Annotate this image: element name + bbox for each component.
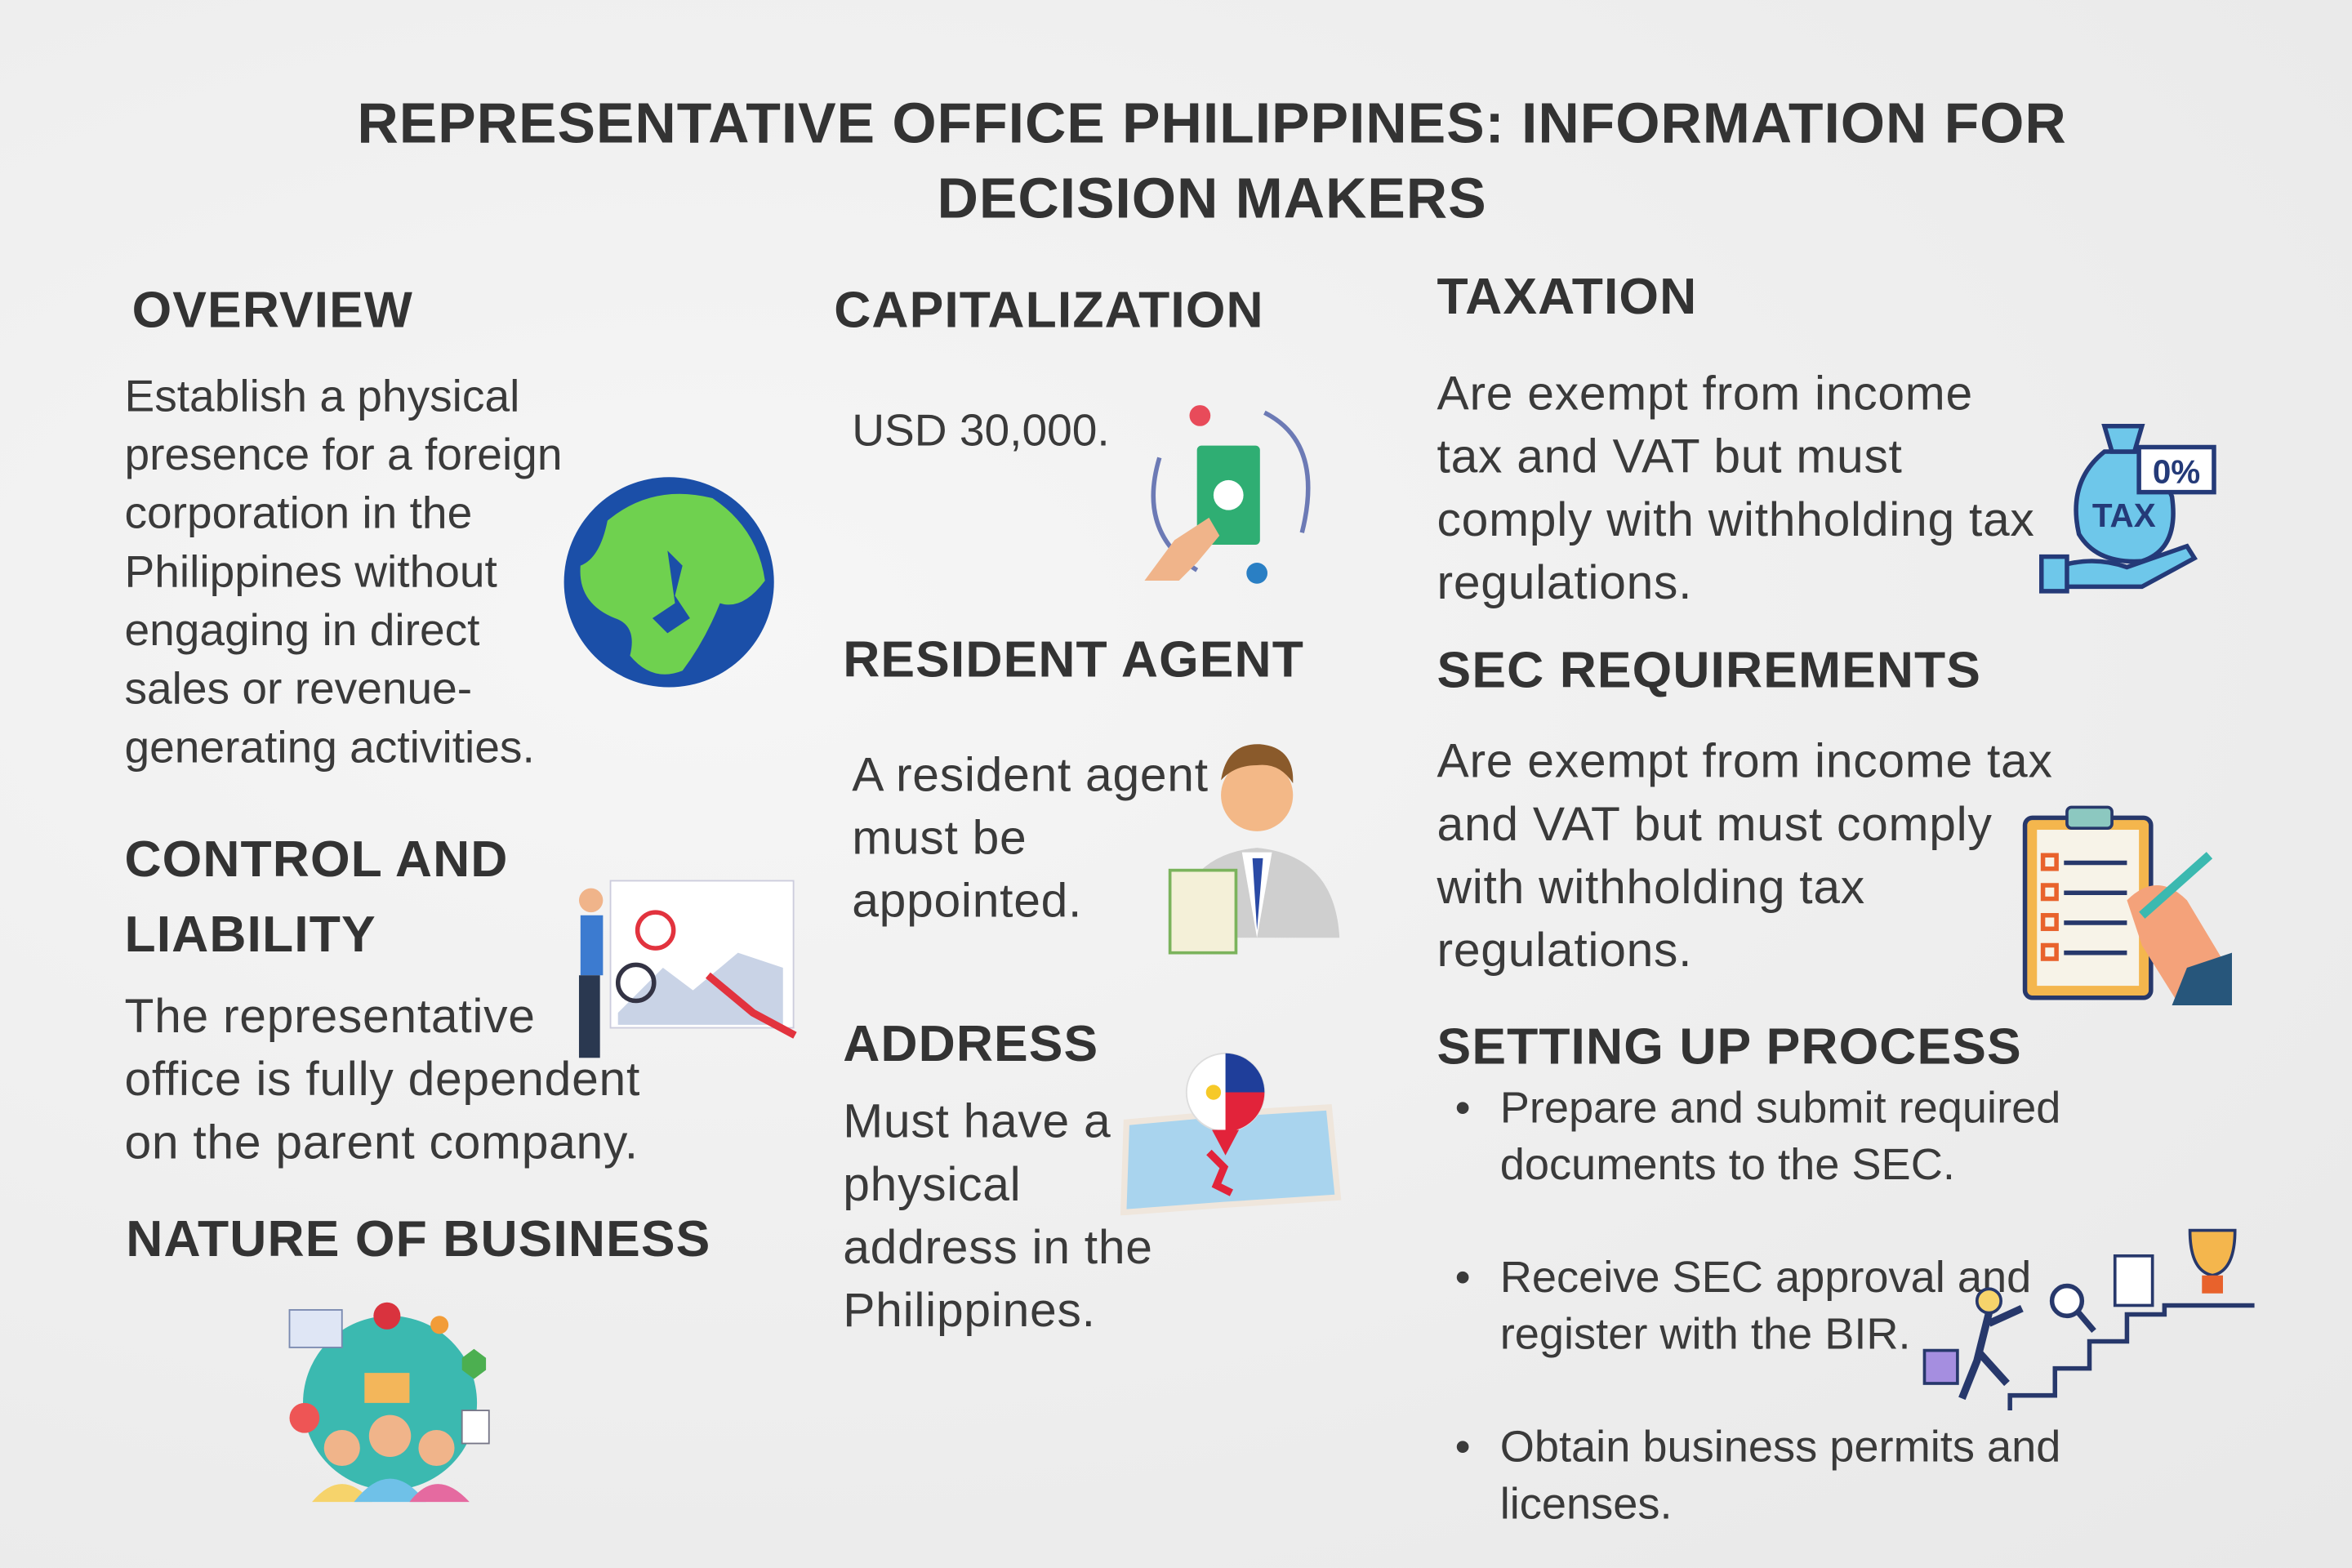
text: address: Must have a <box>843 1094 1111 1148</box>
text: Receive SEC approval and <box>1500 1253 2031 1303</box>
text: overview: Philippines without <box>124 548 497 597</box>
heading: address: ADDRESS <box>843 1016 1098 1073</box>
text: resident agent: A resident agent <box>852 747 1209 801</box>
heading: taxation: TAXATION <box>1437 269 1697 326</box>
heading: capitalization: CAPITALIZATION <box>834 282 1264 339</box>
text: Prepare and submit required <box>1500 1084 2060 1133</box>
heading: sec requirements: SEC REQUIREMENTS <box>1437 642 1981 699</box>
text: taxation: comply with withholding tax <box>1437 492 2035 546</box>
icon: agent <box>1168 744 1339 954</box>
text: overview: engaging in direct <box>124 606 479 656</box>
text: • <box>1455 1423 1471 1472</box>
heading: control and liability: LIABILITY <box>124 906 376 964</box>
text: address: address in the <box>843 1220 1153 1274</box>
title: REPRESENTATIVE OFFICE PHILIPPINES: INFORMATION FOR <box>357 93 2067 156</box>
text: Obtain business permits and <box>1500 1423 2060 1472</box>
heading: setting up process: SETTING UP PROCESS <box>1437 1019 2022 1076</box>
text: overview: presence for a foreign <box>124 430 562 480</box>
text: taxation: tax and VAT but must <box>1437 429 1903 483</box>
text: sec requirements: and VAT but must comply <box>1437 797 1993 851</box>
text: overview: generating activities. <box>124 724 535 773</box>
text: documents to the SEC. <box>1500 1139 1955 1189</box>
heading: overview: OVERVIEW <box>132 282 413 339</box>
text: overview: sales or revenue- <box>124 665 472 715</box>
icon: globe <box>564 477 774 688</box>
text: sec requirements <box>1437 733 2053 977</box>
heading: nature of business: NATURE OF BUSINESS <box>126 1211 710 1268</box>
text: sec requirements: Are exempt from income tax <box>1437 733 2053 788</box>
text: control: on the parent company. <box>124 1115 639 1169</box>
text: overview <box>124 372 562 773</box>
text: address <box>843 1094 1153 1337</box>
heading: control and liability: CONTROL AND <box>124 831 509 889</box>
icon: analyst chart <box>578 880 797 1058</box>
text: overview: Establish a physical <box>124 372 519 421</box>
text: resident agent <box>852 747 1209 927</box>
text: licenses. <box>1500 1479 1673 1528</box>
text: taxation: regulations. <box>1437 555 1692 609</box>
text: overview: corporation in the <box>124 489 472 539</box>
text: taxation <box>1437 366 2035 609</box>
text: • <box>1455 1084 1471 1133</box>
icon: map pin <box>1120 1053 1341 1215</box>
icon: business team <box>289 1302 490 1503</box>
text: resident agent: must be <box>852 810 1027 864</box>
icon: stairs to success <box>1922 1228 2255 1410</box>
title <box>357 93 2067 231</box>
icon: tax bag <box>2039 424 2216 594</box>
heading: resident agent: RESIDENT AGENT <box>843 632 1304 688</box>
text: capitalization: USD 30,000. <box>852 407 1110 457</box>
text: sec requirements: regulations. <box>1437 923 1692 977</box>
title: DECISION MAKERS <box>938 168 1487 231</box>
text: control: office is fully dependent <box>124 1052 640 1106</box>
text: control: The representative <box>124 989 536 1043</box>
icon: tax bag: 0% <box>2153 453 2200 491</box>
icon: money cycle <box>1145 405 1311 584</box>
text: taxation: Are exempt from income <box>1437 366 1973 420</box>
text: register with the BIR. <box>1500 1309 1911 1359</box>
text: control <box>124 989 640 1169</box>
text: address: physical <box>843 1157 1021 1211</box>
text: sec requirements: with withholding tax <box>1437 860 1865 914</box>
heading: control and liability <box>124 831 509 964</box>
text: • <box>1455 1253 1471 1303</box>
icon: clipboard <box>2022 805 2233 1005</box>
icon: tax bag: TAX <box>2092 497 2156 534</box>
text: address: Philippines. <box>843 1283 1096 1337</box>
text: resident agent: appointed. <box>852 873 1082 927</box>
list: steps <box>1455 1084 2060 1528</box>
